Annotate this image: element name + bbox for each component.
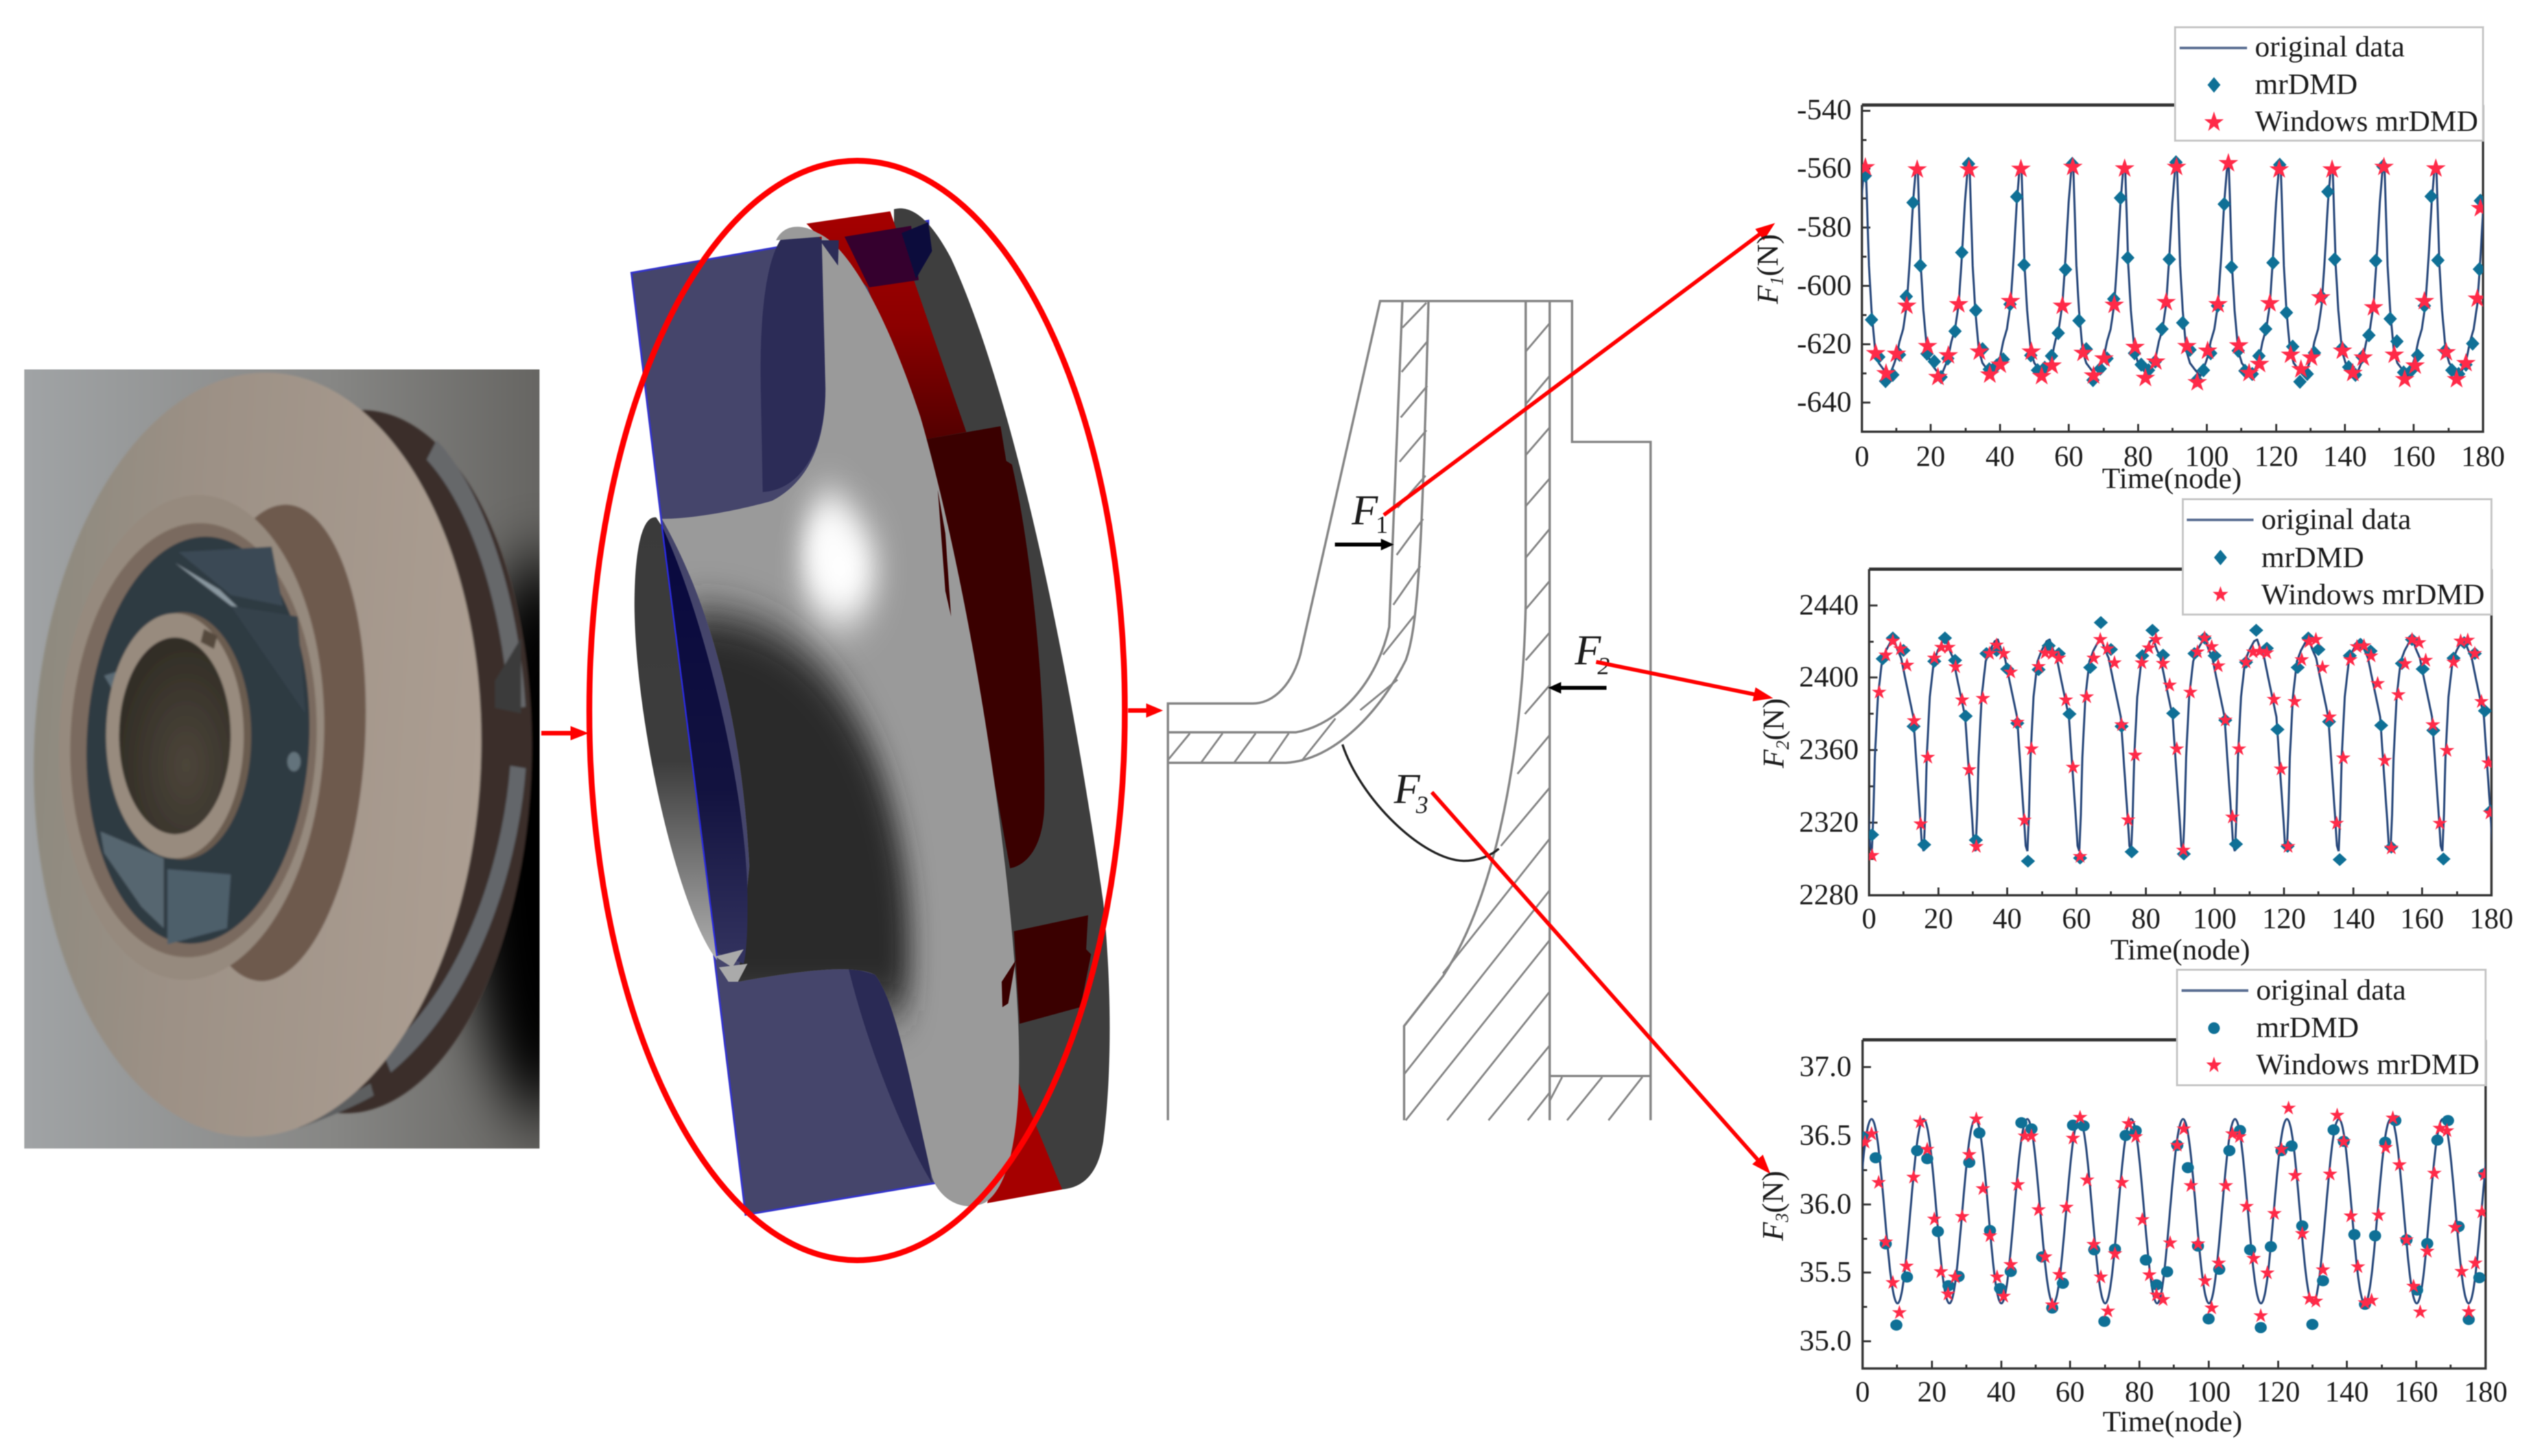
F1 axes frame and ticks (1862, 105, 2483, 432)
blade opening (86, 535, 311, 945)
F3 y axis title: 3 (1772, 1213, 1793, 1223)
F2 y tick labels: 2440 (1799, 588, 1859, 621)
F2 x tick labels: 100 (2193, 902, 2237, 935)
dark shadow right of impeller (453, 524, 541, 1148)
F2 x tick labels: 60 (2062, 902, 2091, 935)
F1 y axis title: (N) (1751, 234, 1785, 276)
dark rear disk (894, 208, 1110, 1190)
F3 y tick labels (1800, 1050, 1852, 1357)
F1 x tick labels: 120 (2254, 440, 2298, 473)
F1 x tick labels: 0 (1855, 440, 1869, 473)
F1 x tick labels: 80 (2124, 440, 2152, 473)
F1 legend: Windows mrDMD (2255, 104, 2478, 137)
F2 y axis title: 2 (1773, 740, 1793, 749)
red leader arrow: F1 to chart (1383, 223, 1775, 515)
label F3 (1393, 766, 1428, 819)
F2 y tick labels: 2360 (1799, 733, 1859, 766)
F1 x tick labels (1855, 440, 2505, 473)
F3 x tick labels: 0 (1855, 1376, 1870, 1408)
hub inlet rim (635, 517, 717, 960)
F3 x tick labels: 60 (2055, 1376, 2085, 1408)
F3 y axis title: (N) (1756, 1171, 1790, 1213)
F1 x tick labels: 160 (2392, 440, 2436, 473)
F3 legend: original data (2256, 973, 2406, 1006)
label F2 with force arrow: F (1574, 627, 1601, 674)
purple plane overlap (845, 226, 919, 287)
F2 x tick labels: 0 (1862, 902, 1876, 935)
F3 axes frame and ticks (1863, 1040, 2486, 1368)
F3 y tick labels: 35.0 (1800, 1324, 1852, 1357)
F2 legend: mrDMD (2261, 541, 2364, 574)
F3 legend: Windows mrDMD (2256, 1048, 2479, 1081)
F2 x axis title: Time(node) (2110, 933, 2250, 966)
F3 x tick labels: 120 (2256, 1376, 2300, 1408)
F2 x tick labels: 120 (2262, 902, 2306, 935)
F1 y tick labels: -600 (1797, 268, 1852, 301)
F3 y axis title: F (1756, 1221, 1790, 1241)
F1 legend: original data (2255, 30, 2405, 63)
F2 x tick labels: 160 (2400, 902, 2444, 935)
chart: F1 time series (1751, 27, 2505, 495)
F1 x tick labels: 140 (2323, 440, 2367, 473)
F2 data plotted series (1820, 616, 2497, 867)
photo background (24, 370, 539, 1149)
arrow: model to section (1128, 703, 1163, 718)
F2 legend (2183, 499, 2491, 615)
F2 x tick labels: 20 (1924, 902, 1953, 935)
label F2 with force arrow (1548, 627, 1610, 694)
F2 x tick labels (1862, 902, 2513, 935)
F1 y axis title: 1 (1767, 276, 1787, 285)
grey shroud surface with shading (646, 207, 1027, 1221)
F1 legend (2175, 27, 2483, 141)
F3 x tick labels: 140 (2325, 1376, 2369, 1408)
chart: F3 time series (1756, 970, 2508, 1438)
F2 y tick labels: 2320 (1799, 805, 1859, 838)
F2 legend: Windows mrDMD (2261, 578, 2484, 611)
hub inlet inner face (662, 526, 748, 964)
F3 y tick labels: 37.0 (1800, 1050, 1852, 1083)
F1 y tick labels (1797, 93, 1852, 418)
F1 x tick labels: 20 (1916, 440, 1945, 473)
F3 x tick labels: 100 (2187, 1376, 2231, 1408)
F1 y axis title: F (1751, 285, 1785, 305)
maroon blade upper (926, 426, 1044, 868)
F2 legend: original data (2261, 502, 2411, 535)
F2 y tick labels: 2280 (1799, 878, 1859, 911)
label F3: F (1393, 766, 1420, 813)
F1 y tick labels: -640 (1797, 385, 1852, 418)
F1 x tick labels: 100 (2185, 440, 2229, 473)
F2 x tick labels: 140 (2331, 902, 2375, 935)
arrow: photo to model (541, 726, 589, 740)
red blade strip: top (806, 211, 966, 440)
maroon blade lower (1014, 915, 1091, 1024)
F3 x tick labels (1855, 1376, 2508, 1408)
F3 x tick labels: 40 (1986, 1376, 2016, 1408)
F1 legend: mrDMD (2255, 67, 2357, 100)
label F2 with force arrow: 2 (1597, 653, 1610, 680)
section outlines and hatching (1168, 301, 1651, 1120)
F3 legend (2177, 970, 2486, 1085)
panel: meridional section drawing (1168, 301, 1651, 1120)
F2 y tick labels (1799, 588, 1859, 911)
F3 x tick labels: 20 (1918, 1376, 1946, 1408)
F3 legend: mrDMD (2256, 1011, 2359, 1044)
transparent blue cutting plane (631, 221, 936, 1215)
red leader arrow: F3 to chart (1431, 792, 1771, 1174)
label F1 with force arrow: F (1351, 487, 1378, 534)
F3 x tick labels: 80 (2125, 1376, 2154, 1408)
F1 x axis title: Time(node) (2102, 462, 2242, 495)
eye front ring (189, 502, 325, 978)
F2 y tick labels: 2400 (1799, 660, 1859, 693)
F1 y tick labels: -540 (1797, 93, 1852, 126)
F1 y tick labels: -560 (1797, 151, 1852, 184)
F2 y axis title: F (1757, 749, 1791, 769)
red ellipse highlight (589, 161, 1125, 1260)
F2 x tick labels: 80 (2132, 902, 2160, 935)
F1 y tick labels: -580 (1797, 210, 1852, 243)
F2 axes frame and ticks (1869, 569, 2491, 895)
F3 x axis title: Time(node) (2102, 1405, 2243, 1438)
impeller back ring with blades (303, 408, 534, 1127)
F1 x tick labels: 60 (2054, 440, 2084, 473)
panel: impeller photograph (23, 368, 541, 1149)
F3 y tick labels: 36.0 (1800, 1187, 1852, 1220)
F1 y tick labels: -620 (1797, 327, 1852, 360)
F3 x tick labels: 160 (2394, 1376, 2438, 1408)
F2 y axis title: (N) (1757, 698, 1791, 740)
panel: 3D impeller model (631, 207, 1110, 1221)
F1 x tick labels: 180 (2461, 440, 2505, 473)
F2 x tick labels: 180 (2469, 902, 2513, 935)
F2 x tick labels: 40 (1993, 902, 2021, 935)
F3 data plotted series (1820, 1100, 2495, 1333)
F3 x tick labels: 180 (2464, 1376, 2508, 1408)
central hub ring (106, 612, 251, 860)
blade slits (937, 490, 951, 616)
F1 data plotted series (1813, 153, 2490, 391)
label F1 with force arrow (1335, 487, 1394, 550)
red blade strip: bottom (987, 1076, 1062, 1203)
F1 x tick labels: 40 (1985, 440, 2015, 473)
chart: F2 time series (1757, 499, 2513, 966)
label F3: 3 (1415, 792, 1428, 819)
F3 y tick labels: 35.5 (1800, 1255, 1852, 1288)
F3 y tick labels: 36.5 (1800, 1118, 1852, 1151)
red leader arrow: F2 to chart (1596, 662, 1773, 701)
eye recess (230, 504, 367, 982)
front shroud disk (32, 372, 484, 1137)
label F1 with force arrow: 1 (1376, 511, 1388, 539)
